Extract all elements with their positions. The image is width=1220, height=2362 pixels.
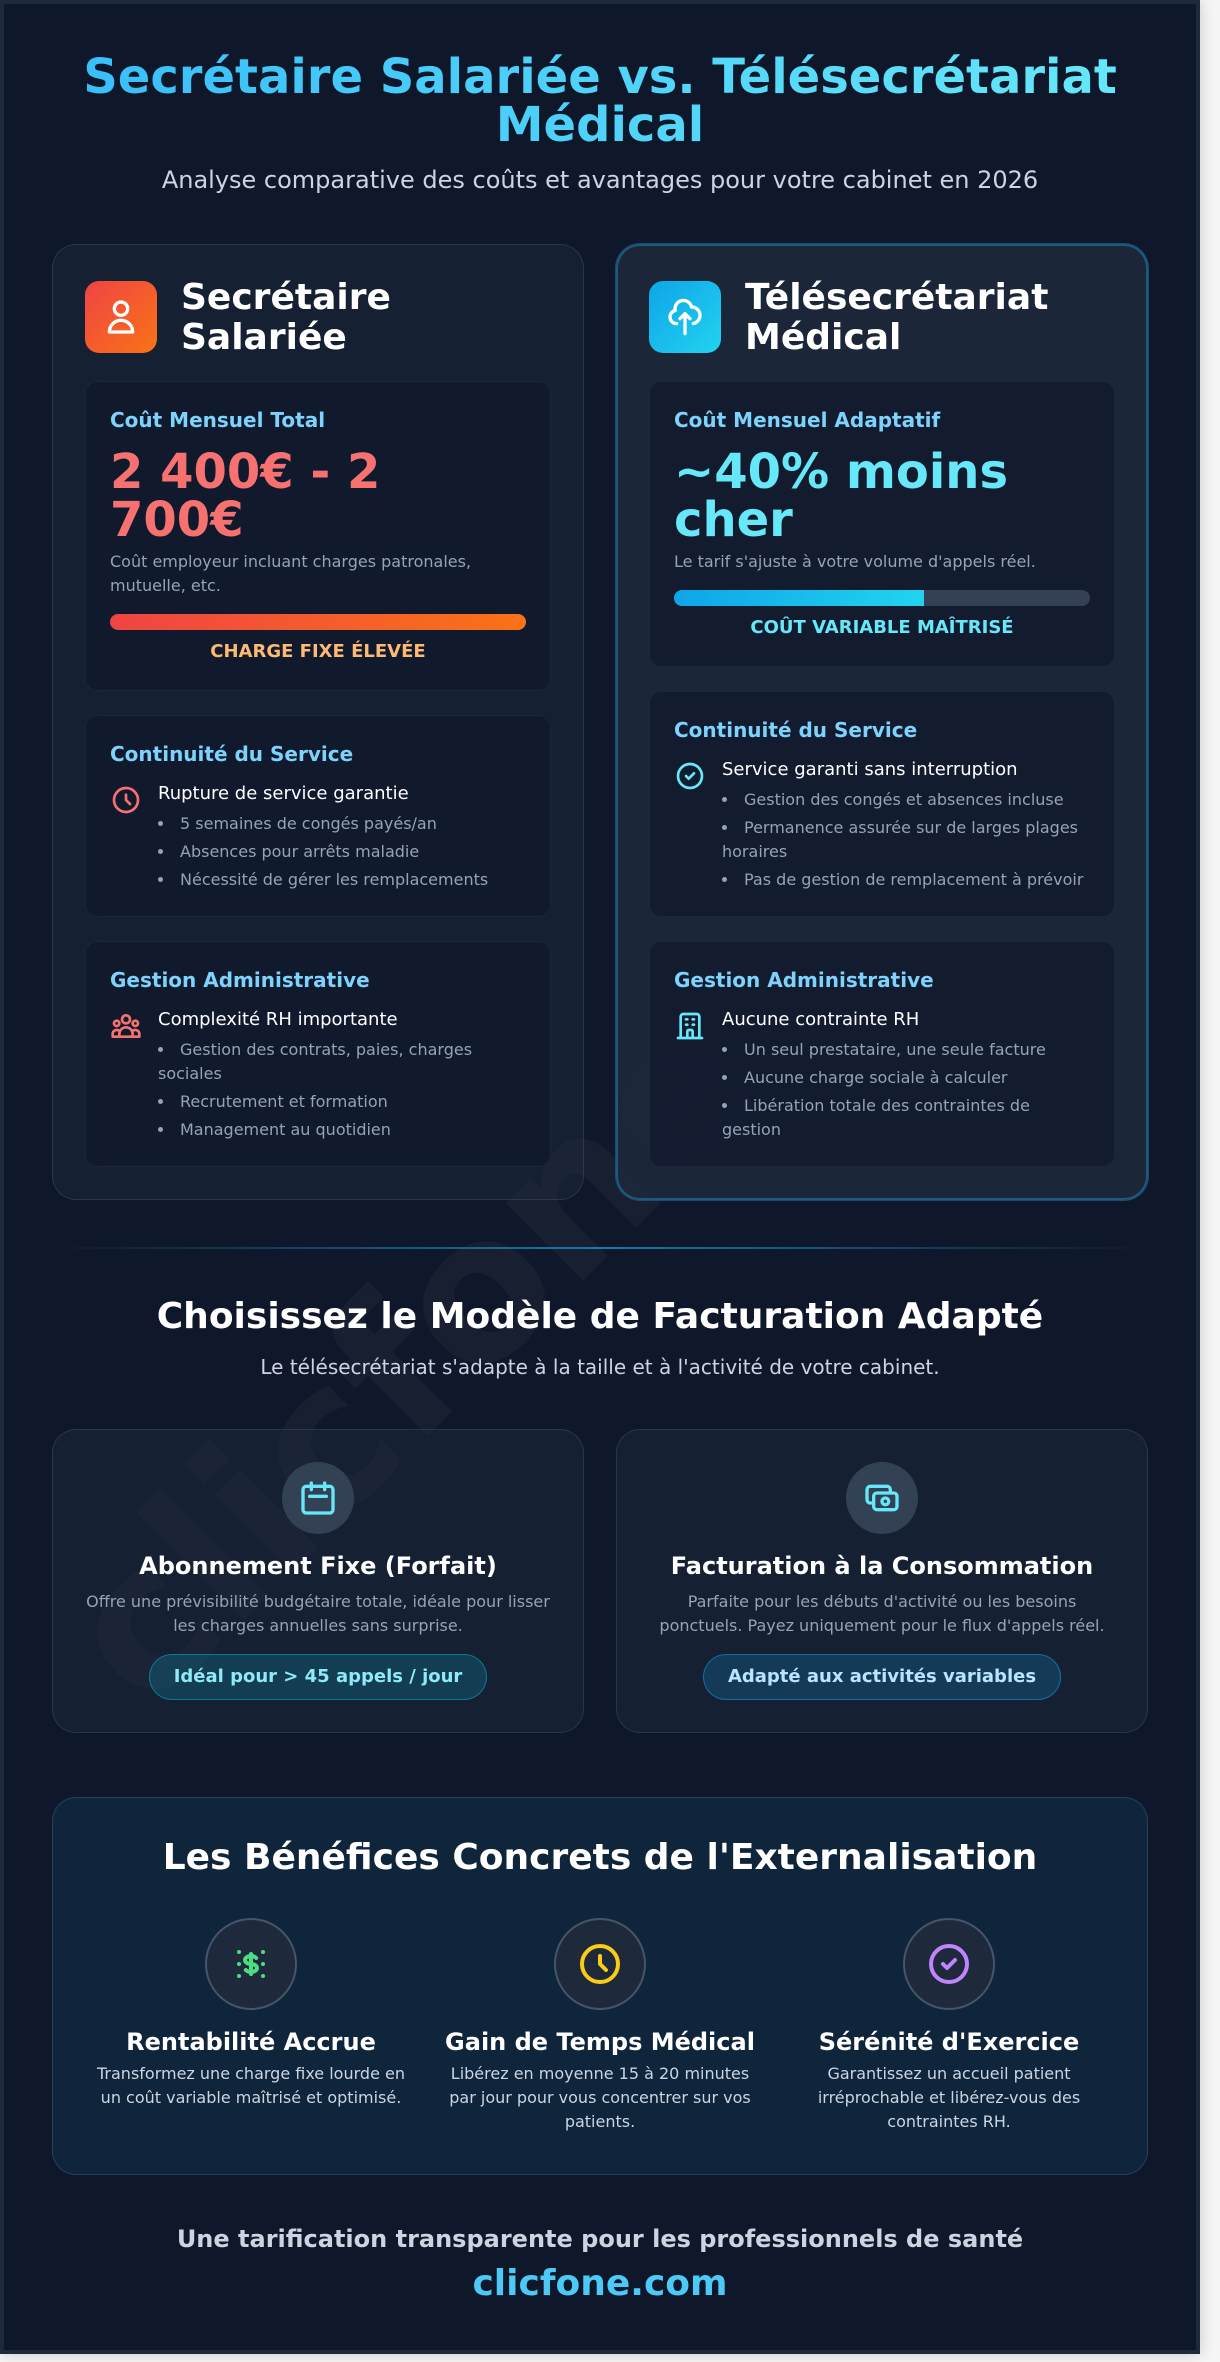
card title: Abonnement Fixe (Forfait) [139, 1552, 497, 1580]
section heading: modèle de facturation [157, 1296, 1043, 1379]
icon: clock [112, 786, 140, 814]
metric value [674, 444, 1008, 548]
panel: bénéfices [52, 1797, 1148, 2175]
cost bar [110, 614, 526, 630]
card description: Parfaite pour les débuts d'activité ou les besoins [688, 1592, 1076, 1611]
benefit description [818, 2064, 1080, 2131]
metric value: ~40% moins [674, 444, 1008, 500]
card description: Offre une prévisibilité budgétaire totale, idéale pour lisser [86, 1592, 550, 1611]
icon: calendar [282, 1462, 354, 1534]
item title: Aucune contrainte RH [722, 1009, 919, 1030]
benefit title: Gain de Temps Médical [445, 2028, 755, 2056]
card description: les charges annuelles sans surprise. [173, 1616, 463, 1635]
benefit description: patients. [565, 2112, 635, 2131]
bar caption: COÛT VARIABLE MAÎTRISÉ [750, 617, 1014, 638]
panel heading [181, 277, 391, 358]
subtitle: Analyse comparative des coûts et avantages pour votre cabinet en 2026 [162, 166, 1038, 194]
card description [659, 1592, 1105, 1635]
card title: Facturation à la Consommation [671, 1552, 1093, 1580]
benefit description: Transformez une charge fixe lourde en [97, 2064, 405, 2083]
benefit title: Sérénité d'Exercice [819, 2028, 1079, 2056]
item list: Absences pour arrêts maladie [180, 842, 419, 861]
block: continuité du service [85, 715, 551, 917]
block heading: Continuité du Service [110, 742, 353, 766]
benefit description: contraintes RH. [887, 2112, 1011, 2131]
item list: Gestion des contrats, paies, charges sociales [158, 1040, 472, 1083]
metric value: 700€ [110, 492, 244, 548]
item list: Aucune charge sociale à calculer [744, 1068, 1008, 1087]
cost bar [674, 590, 1090, 606]
panel: télésecrétariat médical [616, 244, 1148, 1200]
block: continuité du service [649, 691, 1115, 917]
heading: Choisissez le Modèle de Facturation Adapté [157, 1296, 1043, 1337]
pill: Idéal pour > 45 appels / jour [174, 1666, 462, 1687]
footer brand: clicfone.com [472, 2263, 728, 2304]
item title: Complexité RH importante [158, 1009, 398, 1030]
icon: dollar [205, 1918, 297, 2010]
block: gestion administrative [649, 941, 1115, 1167]
block: gestion administrative [85, 941, 551, 1167]
item title: Service garanti sans interruption [722, 759, 1018, 780]
block heading: Gestion Administrative [674, 968, 934, 992]
title: Secrétaire Salariée vs. Télésecrétariat Médical [83, 49, 1117, 153]
icon: check [903, 1918, 995, 2010]
item list [158, 814, 488, 889]
bar caption: CHARGE FIXE ÉLEVÉE [210, 641, 426, 662]
block: coût mensuel total [85, 381, 551, 691]
panel heading [745, 277, 1048, 358]
icon: cloud upload [649, 281, 721, 353]
card description: ponctuels. Payez uniquement pour le flux d'appels réel. [659, 1616, 1105, 1635]
card description [86, 1592, 550, 1635]
panel: facturation à la consommation [616, 1429, 1148, 1733]
panel: abonnement fixe [52, 1429, 584, 1733]
icon: clock [554, 1918, 646, 2010]
icon: users [111, 1014, 141, 1038]
footer [177, 2225, 1023, 2304]
subheading: Le télésecrétariat s'adapte à la taille et à l'activité de votre cabinet. [260, 1355, 940, 1379]
benefit description: un coût variable maîtrisé et optimisé. [101, 2088, 401, 2107]
item list: 5 semaines de congés payés/an [180, 814, 437, 833]
benefit description: Garantissez un accueil patient [827, 2064, 1071, 2083]
text: clicfone [17, 965, 802, 1750]
pill [149, 1654, 487, 1700]
panel heading: Salariée [181, 317, 347, 358]
item list: Nécessité de gérer les remplacements [180, 870, 488, 889]
panel heading: Les Bénéfices Concrets de l'Externalisation [163, 1837, 1037, 1878]
metric note: mutuelle, etc. [110, 576, 221, 595]
panel heading: Médical [745, 317, 901, 358]
panel: secrétaire salariée [52, 244, 584, 1200]
panel heading: Télésecrétariat [745, 277, 1048, 318]
benefit title: Rentabilité Accrue [126, 2028, 376, 2056]
metric label: Coût Mensuel Adaptatif [674, 408, 940, 432]
metric value: 2 400€ - 2 [110, 444, 380, 500]
pill: Adapté aux activités variables [728, 1666, 1036, 1687]
item list: Un seul prestataire, une seule facture [744, 1040, 1046, 1059]
metric note: Le tarif s'ajuste à votre volume d'appels réel. [674, 552, 1036, 571]
item list: Recrutement et formation [180, 1092, 388, 1111]
item list: Gestion des congés et absences incluse [744, 790, 1064, 809]
block heading: Gestion Administrative [110, 968, 370, 992]
benefit description: irréprochable et libérez-vous des [818, 2088, 1080, 2107]
icon: check circle [676, 762, 704, 790]
benefit description [449, 2064, 751, 2131]
item title: Rupture de service garantie [158, 783, 409, 804]
footer tagline: Une tarification transparente pour les professionnels de santé [177, 2225, 1023, 2253]
header: title and subtitle [83, 49, 1117, 194]
benefit description: par jour pour vous concentrer sur vos [449, 2088, 751, 2107]
metric value [110, 444, 380, 548]
metric value: cher [674, 492, 793, 548]
metric note: Coût employeur incluant charges patronales, [110, 552, 471, 571]
item list: Permanence assurée sur de larges plages horaires [722, 818, 1078, 861]
panel heading: Secrétaire [181, 277, 391, 318]
benefit description: Libérez en moyenne 15 à 20 minutes [451, 2064, 749, 2083]
metric label: Coût Mensuel Total [110, 408, 325, 432]
bar fill 60% [674, 590, 924, 606]
block heading: Continuité du Service [674, 718, 917, 742]
icon: cash [846, 1462, 918, 1534]
metric note [110, 552, 471, 595]
block: coût mensuel adaptatif [649, 381, 1115, 667]
item list: Libération totale des contraintes de gestion [722, 1096, 1030, 1139]
item list [722, 790, 1084, 889]
icon: user [85, 281, 157, 353]
pill [703, 1654, 1061, 1700]
item list [722, 1040, 1046, 1139]
item list: Management au quotidien [180, 1120, 391, 1139]
item list: Pas de gestion de remplacement à prévoir [744, 870, 1083, 889]
icon: building [676, 1012, 704, 1040]
item list [158, 1040, 472, 1139]
benefit description [96, 2064, 405, 2107]
